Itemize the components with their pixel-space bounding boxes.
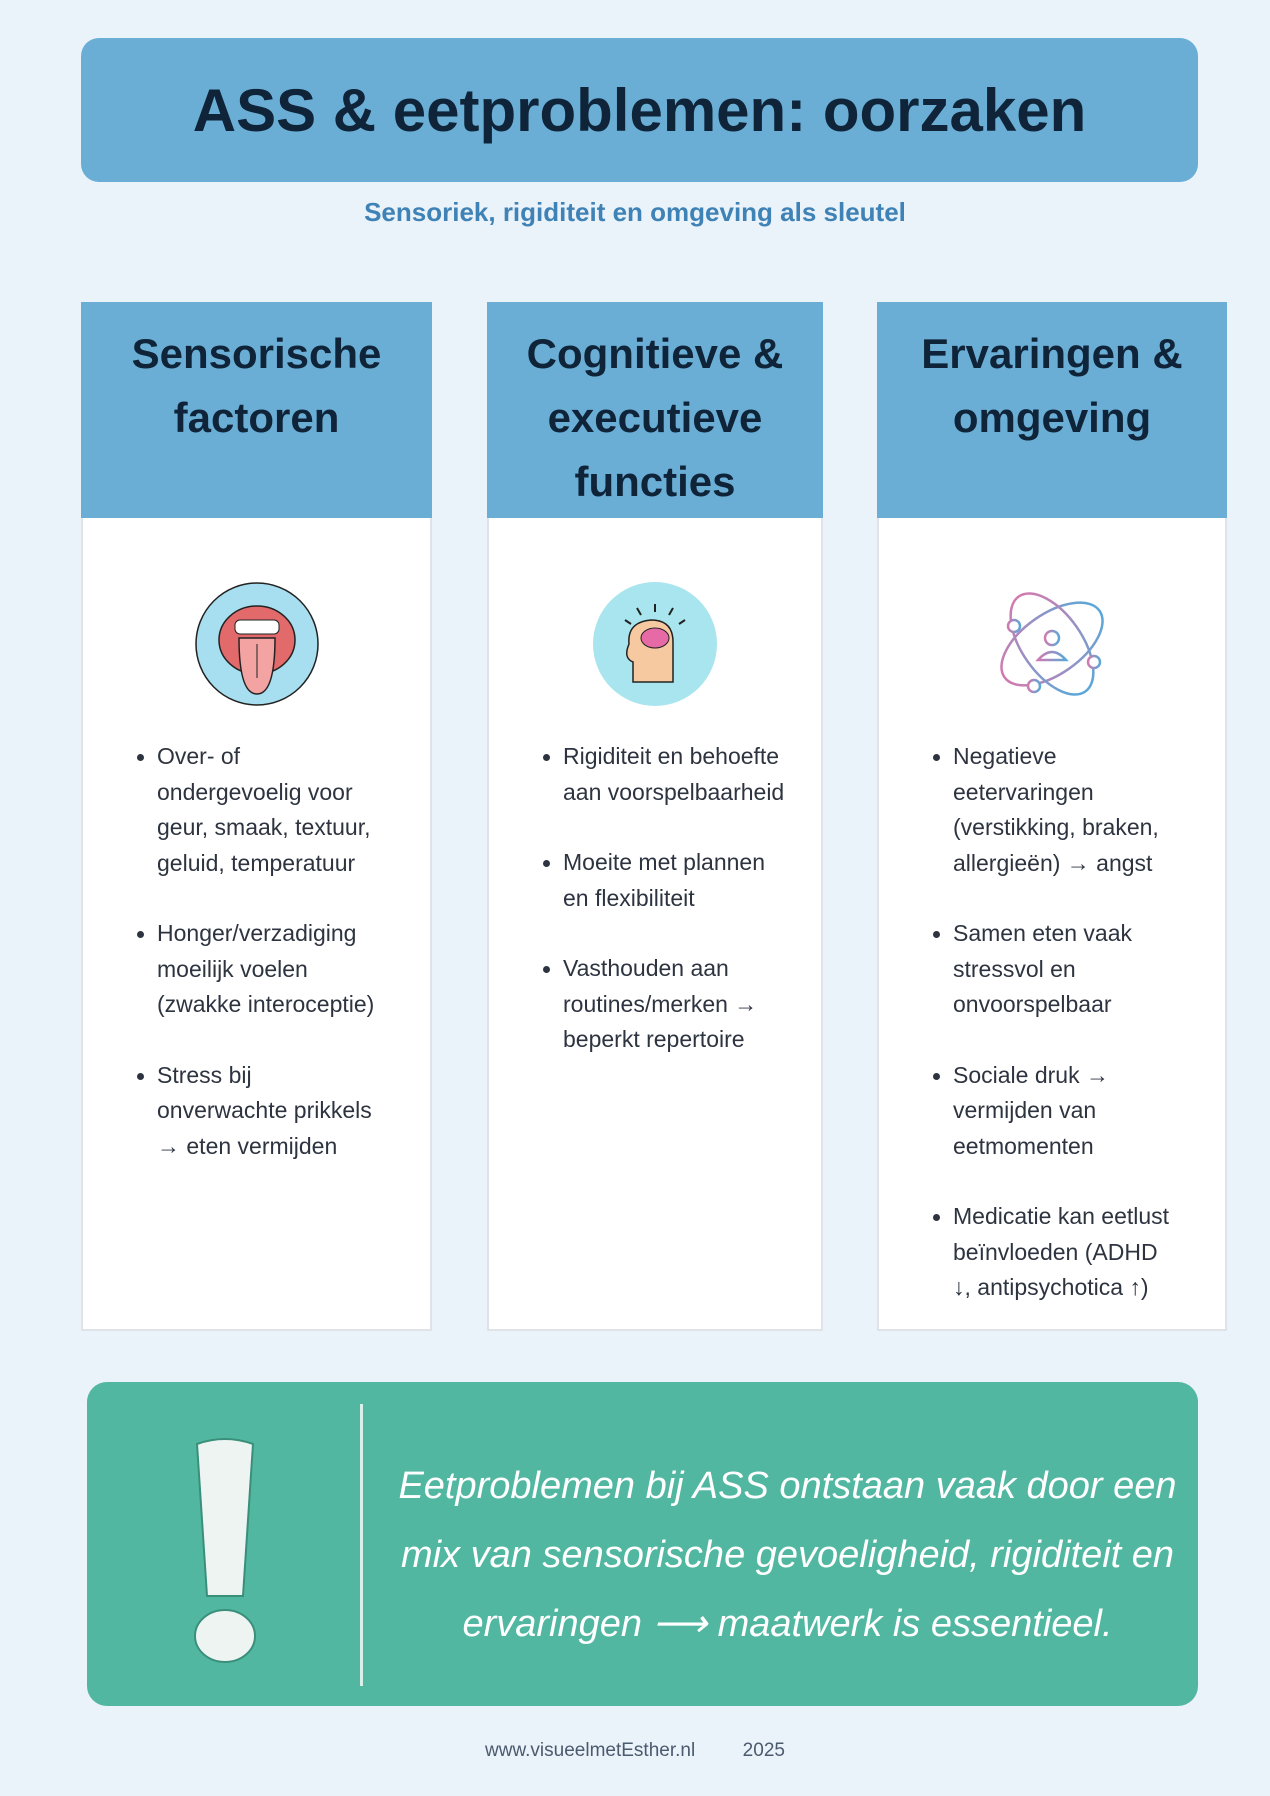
heading: cognitieve: functies xyxy=(574,458,736,505)
subtitle: Sensoriek, rigiditeit en omgeving als sleutel xyxy=(364,197,906,227)
heading: ervaringen: Ervaringen & xyxy=(921,330,1183,377)
bullets xyxy=(137,743,374,1159)
bullets: Stress bij onverwachte prikkels → eten vermijden xyxy=(157,1062,372,1158)
divider xyxy=(360,1404,363,1686)
bullets: Vasthouden aan routines/merken → beperkt repertoire xyxy=(563,955,757,1052)
title xyxy=(81,38,1198,182)
heading: sensorische: factoren xyxy=(174,394,339,441)
text: conclusion xyxy=(398,1465,1177,1645)
icon: orbit xyxy=(1000,592,1104,696)
heading: cognitieve xyxy=(487,302,823,518)
panel: ervaringen xyxy=(877,302,1227,1331)
bullets xyxy=(543,743,784,1052)
callout: conclusion xyxy=(87,1382,1198,1706)
heading: sensorische: Sensorische xyxy=(132,330,381,377)
icon: tongue xyxy=(195,582,319,706)
title: ASS & eetproblemen: oorzaken xyxy=(193,76,1086,144)
bullets: en flexibiliteit xyxy=(563,884,695,910)
bullets xyxy=(933,743,1169,1300)
panel: sensorische factoren xyxy=(81,302,432,1331)
text: conclusion: mix van sensorische gevoeligheid, rigiditeit en xyxy=(401,1534,1174,1576)
bullets: Rigiditeit en behoefte aan voorspelbaarheid xyxy=(563,743,784,804)
heading: ervaringen xyxy=(877,302,1227,518)
bullets: Moeite met plannen xyxy=(563,849,765,875)
bullets: Sociale druk → vermijden van eetmomenten xyxy=(953,1062,1109,1158)
bullets: Over- of ondergevoelig voor geur, smaak, textuur, geluid, temperatuur xyxy=(157,743,371,876)
panel: cognitieve xyxy=(487,302,823,1331)
text: conclusion: ervaringen ⟶ maatwerk is essentieel. xyxy=(462,1603,1113,1645)
footer: www.visueelmetEsther.nl 2025 xyxy=(485,1740,785,1761)
icon: brain xyxy=(593,582,717,706)
bullets: Negatieve eetervaringen (verstikking, braken, allergieën) → angst xyxy=(953,743,1159,876)
heading: cognitieve: Cognitieve & xyxy=(527,330,783,377)
icon: exclamation xyxy=(194,1438,256,1663)
heading: ervaringen: omgeving xyxy=(953,394,1151,441)
bullets: Medicatie kan eetlust beïnvloeden (ADHD ↓, antipsychotica ↑) xyxy=(953,1203,1169,1300)
bullets: Samen eten vaak stressvol en onvoorspelbaar xyxy=(953,920,1132,1017)
text: conclusion: Eetproblemen bij ASS ontstaan vaak door een xyxy=(398,1465,1177,1507)
heading: sensorische xyxy=(81,302,432,518)
heading: cognitieve: executieve xyxy=(548,394,762,441)
bullets: Honger/verzadiging moeilijk voelen (zwakke interoceptie) xyxy=(157,920,374,1017)
